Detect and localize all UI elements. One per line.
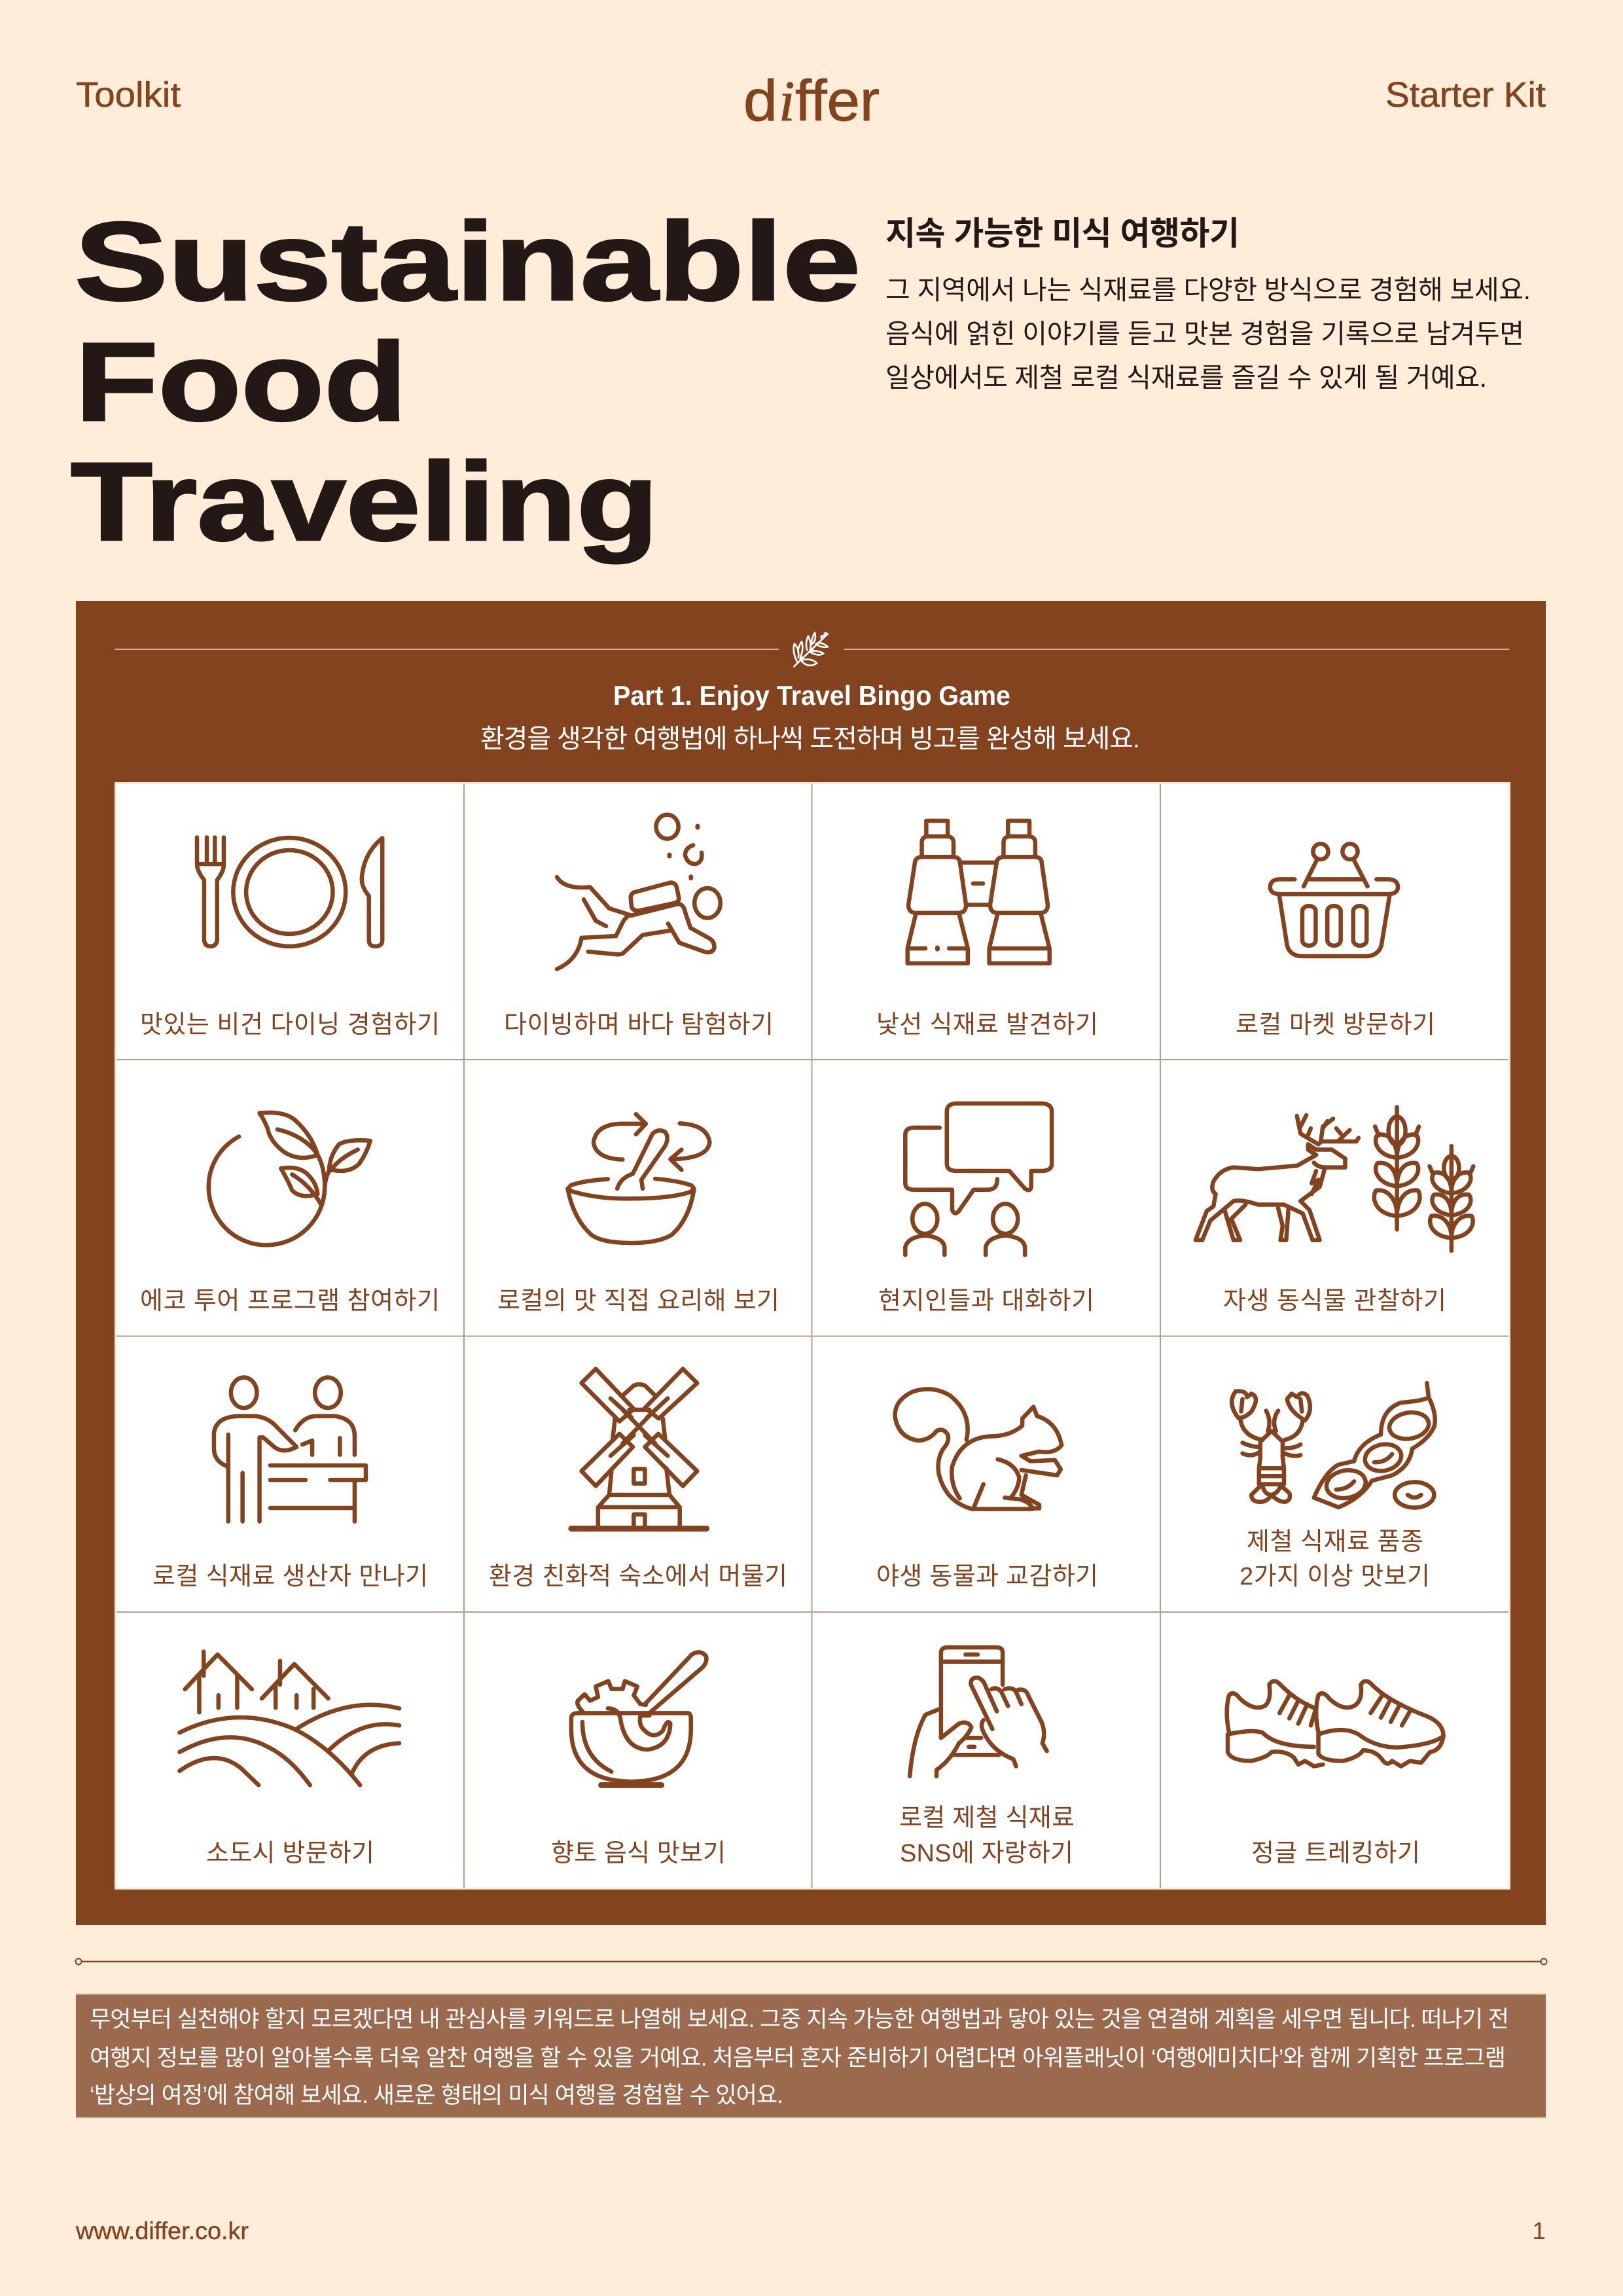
intro text block: 일상에서도 제철 로컬 식재료를 즐길 수 있게 될 거예요. [885, 363, 1487, 393]
icon: trekking shoes [1227, 1681, 1444, 1767]
icon: lobster and beans [1232, 1383, 1435, 1507]
panel: bingo game [76, 601, 1546, 1925]
icon: basket [1270, 844, 1398, 956]
footer url: www.differ.co.kr [75, 2217, 249, 2244]
icon: windmill [571, 1369, 707, 1528]
cell 4 [1236, 844, 1435, 1039]
label [899, 1804, 1075, 1867]
page number: 1 [1532, 2217, 1546, 2244]
cell 2 [504, 815, 774, 1039]
title: Sustainable [75, 200, 861, 324]
cell 7 [878, 1103, 1094, 1315]
icon: wheat sprig [794, 633, 828, 666]
logo: differ: ffer [795, 68, 880, 133]
heading: intro: 지속 가능한 미식 여행하기 [885, 215, 1240, 252]
intro text block: 그 지역에서 나는 식재료를 다양한 방식으로 경험해 보세요. [885, 275, 1531, 305]
intro text block [885, 275, 1531, 393]
label: 향토 음식 맛보기 [551, 1840, 726, 1867]
label: 다이빙하며 바다 탐험하기 [504, 1011, 774, 1039]
label: 낯선 식재료 발견하기 [876, 1011, 1098, 1039]
label: 맛있는 비건 다이닝 경험하기 [140, 1011, 440, 1039]
label: 정글 트레킹하기 [1251, 1840, 1420, 1867]
cell 10 [489, 1369, 787, 1590]
cell 14 [551, 1652, 726, 1867]
icon: squirrel [895, 1389, 1061, 1509]
cell 12 [1232, 1383, 1435, 1590]
label: 소도시 방문하기 [206, 1840, 374, 1867]
icon: deer and wheat [1196, 1107, 1473, 1251]
icon: diver [557, 815, 721, 969]
cell 11 [876, 1389, 1098, 1590]
icon: leaves and circle [209, 1113, 370, 1245]
label: SNS에 자랑하기 [900, 1840, 1073, 1867]
cell 1 [140, 837, 440, 1039]
icon: small town [179, 1652, 399, 1785]
label: 현지인들과 대화하기 [878, 1287, 1094, 1315]
cell 8 [1196, 1107, 1473, 1315]
callout box: ‘밥상의 여정’에 참여해 보세요. 새로운 형태의 미식 여행을 경험할 수 있어요. [90, 2083, 783, 2108]
logo: differ [743, 68, 880, 134]
title: Food [75, 320, 407, 444]
label: 제철 식재료 품종 [1247, 1528, 1423, 1556]
logo: differ: d [743, 68, 777, 133]
label [1240, 1528, 1430, 1590]
cell 9 [152, 1378, 428, 1590]
callout box: 여행지 정보를 많이 알아볼수록 더욱 알찬 여행을 할 수 있을 거예요. 처음부터 혼자 준비하기 어렵다면 아워플래닛이 ‘여행에미치다’와 함께 기획한 프로그램 [90, 2045, 1506, 2071]
label: 로컬 식재료 생산자 만나기 [152, 1563, 428, 1590]
header label: Starter Kit: Starter Kit [1385, 75, 1546, 115]
label: 로컬 제철 식재료 [899, 1804, 1075, 1832]
intro text block: 음식에 얽힌 이야기를 듣고 맛본 경험을 기록으로 남겨두면 [885, 319, 1524, 349]
cell 13 [179, 1652, 399, 1867]
logo: differ: i [779, 70, 794, 134]
icon: mixing bowl [567, 1114, 709, 1243]
cell 5 [140, 1113, 440, 1315]
label: 에코 투어 프로그램 참여하기 [140, 1287, 440, 1315]
label: 환경 친화적 숙소에서 머물기 [489, 1563, 787, 1590]
panel heading: Part 1. Enjoy Travel Bingo Game [613, 680, 1010, 711]
title: Traveling [71, 440, 658, 564]
icon: meeting producers [214, 1378, 366, 1522]
label: 자생 동식물 관찰하기 [1223, 1287, 1446, 1315]
icon: phone and hands [910, 1647, 1047, 1776]
header label: Toolkit: Toolkit [76, 75, 181, 115]
label: 로컬의 맛 직접 요리해 보기 [497, 1287, 779, 1315]
cell 15 [899, 1647, 1075, 1867]
title [71, 200, 861, 564]
icon: fork plate knife [197, 837, 382, 946]
label: 로컬 마켓 방문하기 [1236, 1011, 1435, 1039]
icon: binoculars [908, 821, 1050, 963]
cell 3 [876, 821, 1098, 1039]
label: 야생 동물과 교감하기 [876, 1563, 1098, 1590]
divider with end caps [76, 1958, 1547, 1965]
bingo grid [115, 782, 1510, 1890]
callout box: 무엇부터 실천해야 할지 모르겠다면 내 관심사를 키워드로 나열해 보세요. 그중 지속 가능한 여행법과 닿아 있는 것을 연결해 계획을 세우면 됩니다. 떠나기 전 [90, 2007, 1509, 2032]
icon: local food bowl [571, 1652, 706, 1785]
label: 2가지 이상 맛보기 [1240, 1563, 1430, 1590]
icon: conversation [905, 1103, 1052, 1255]
cell 16 [1227, 1681, 1444, 1867]
cell 6 [497, 1114, 779, 1315]
panel subheading: 환경을 생각한 여행법에 하나씩 도전하며 빙고를 완성해 보세요. [480, 725, 1140, 753]
callout box [76, 1994, 1546, 2118]
